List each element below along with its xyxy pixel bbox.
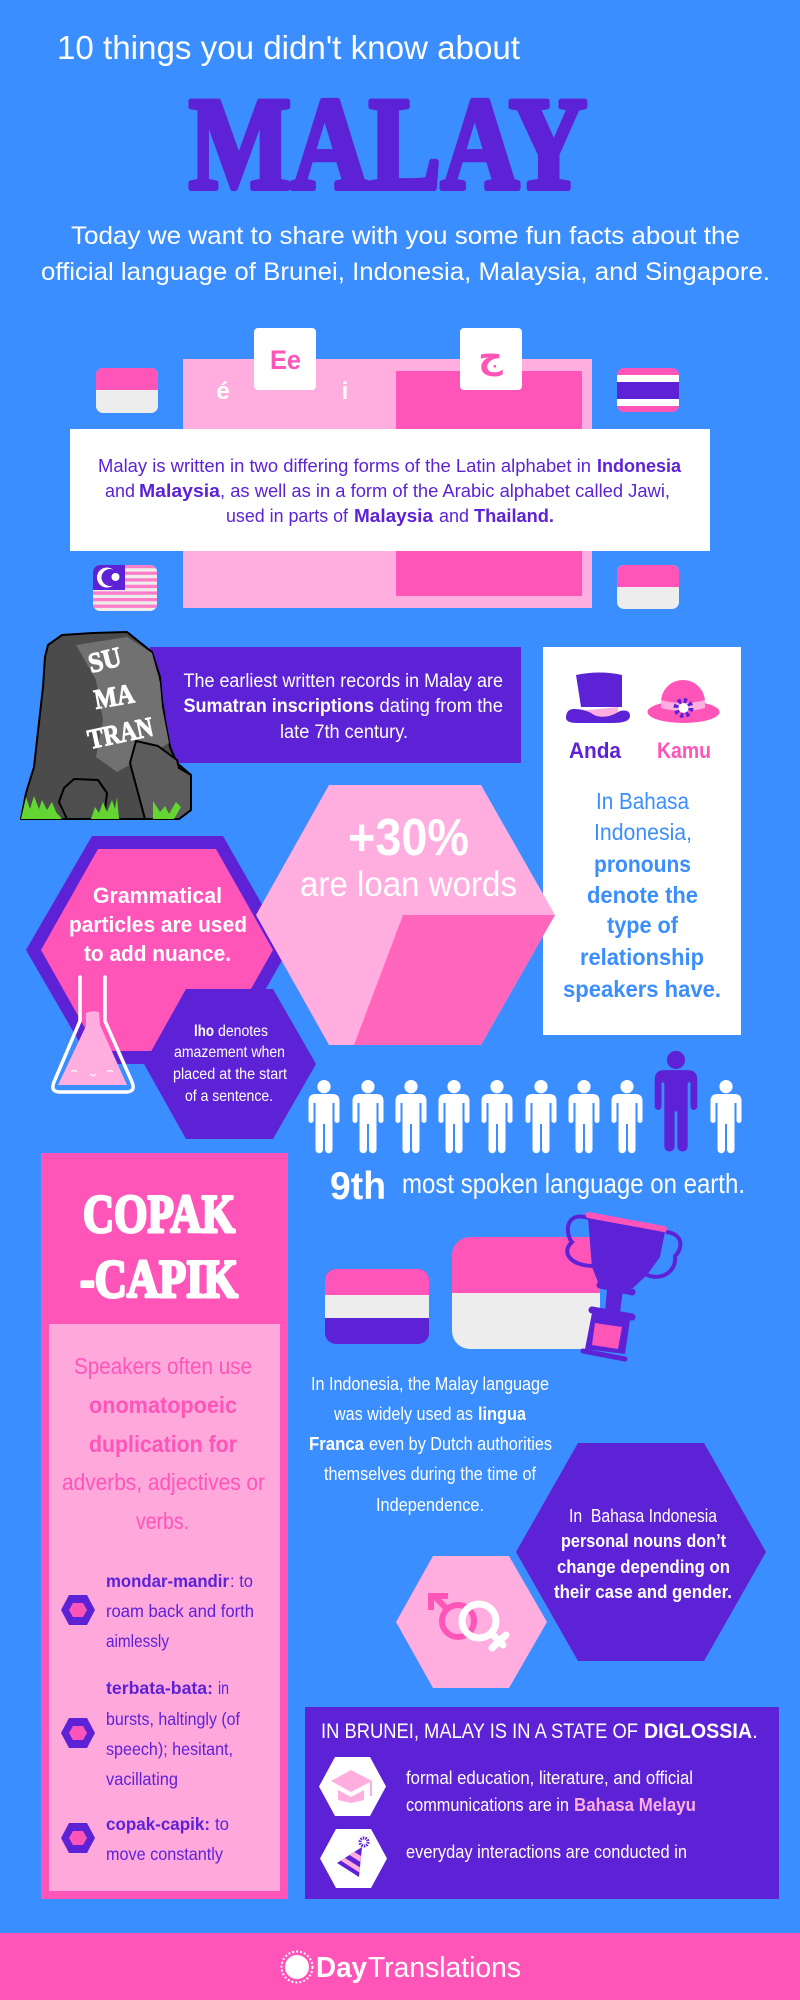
panel: personal nouns hexagon: their case and gender.: [554, 1582, 732, 1602]
panel: lho hexagon: placed at the start: [173, 1066, 287, 1083]
panel: personal nouns hexagon: change depending on: [557, 1557, 730, 1577]
heading: copak-capik: [80, 1184, 238, 1309]
text: formal register: [406, 1768, 696, 1815]
panel: copak-capik: [41, 1153, 288, 1899]
icon: trophy: [567, 1215, 680, 1359]
Latin letters: é: [216, 378, 230, 405]
panel: pronouns: Kamu: [657, 738, 711, 763]
title line: 10 things you didn't know about: [57, 29, 520, 66]
list item: copak-capik: to: [215, 1814, 229, 1834]
callout: writing forms: used in parts of: [226, 506, 349, 526]
list item: terbata-bata: [61, 1678, 240, 1789]
logo wordmark: Day: [316, 1952, 367, 1984]
panel: Sumatran inscriptions: dating from the: [380, 696, 503, 717]
intro paragraph: [41, 222, 770, 286]
text: formal register: formal education, literature, and official: [406, 1768, 693, 1788]
list item: mondar-mandir: aimlessly: [106, 1631, 169, 1651]
list item: terbata-bata: in: [218, 1678, 229, 1698]
heading: diglossia: IN BRUNEI, MALAY IS IN A STATE OF: [321, 1719, 638, 1743]
text: onomatopoeic duplication: Speakers often use: [74, 1353, 252, 1379]
callout: writing forms: Indonesia: [597, 456, 682, 476]
icon: graduation cap: [319, 1757, 386, 1816]
icon: gender symbols: [431, 1596, 506, 1648]
icon: top hat: [566, 672, 630, 723]
panel: pronouns: type of: [607, 912, 678, 938]
panel: lho hexagon: amazement when: [174, 1044, 285, 1061]
panel: pronouns: speakers have.: [563, 976, 721, 1002]
flag: Brunei-style bands: [325, 1269, 429, 1344]
callout: writing forms: , as well as in a form of the Arabic alphabet called Jawi,: [220, 481, 670, 501]
text: onomatopoeic duplication: duplication for: [89, 1431, 237, 1457]
panel: lho hexagon: denotes: [218, 1023, 268, 1040]
list item: terbata-bata: bursts, haltingly (of: [106, 1709, 240, 1729]
heading: copak-capik: -CAPIK: [80, 1249, 238, 1309]
flag: Indonesia bottom right: [617, 565, 679, 609]
intro paragraph: Today we want to share with you some fun facts about the: [71, 222, 740, 250]
ranking statement: [330, 1165, 745, 1208]
panel: Sumatran inscriptions: [150, 647, 521, 763]
callout: writing forms: and: [105, 481, 135, 501]
panel: grammatical particles: particles are used: [69, 912, 247, 937]
flag: Indonesia large: [452, 1237, 600, 1349]
text: onomatopoeic duplication: adverbs, adjectives or: [62, 1469, 265, 1495]
text: formal register: Bahasa Melayu: [574, 1795, 696, 1815]
Latin letters: i: [342, 378, 348, 405]
callout: writing forms: [70, 429, 710, 551]
panel: personal nouns hexagon: personal nouns don’t: [561, 1531, 726, 1551]
icon: party hat: [320, 1829, 387, 1888]
panel: writing systems: [70, 328, 710, 611]
list item: mondar-mandir: : to: [230, 1571, 253, 1591]
Jawi letter: [460, 328, 522, 390]
panel: pronouns: relationship: [580, 944, 704, 970]
callout: writing forms: Malaysia: [354, 506, 434, 526]
panel: grammatical particles: to add nuance.: [84, 941, 231, 966]
panel: gender icon hexagon: [396, 1556, 547, 1688]
text: lingua franca: lingua: [478, 1404, 527, 1424]
text: lingua franca: even by Dutch authorities: [369, 1434, 552, 1454]
callout: writing forms: Malaysia: [139, 481, 221, 501]
panel: personal nouns hexagon: [516, 1443, 766, 1661]
flag: Indonesia top left: [96, 368, 158, 413]
icon: inscribed rock: TRAN: [85, 712, 156, 756]
Latin letters: Ee: [270, 345, 301, 375]
panel: pronouns: [543, 647, 741, 1035]
text: onomatopoeic duplication: [62, 1353, 265, 1534]
footer band: [0, 1933, 800, 2000]
list item: mondar-mandir: mondar-mandir: [106, 1571, 229, 1591]
text: onomatopoeic duplication: verbs.: [136, 1508, 189, 1534]
list item: copak-capik: copak-capik:: [106, 1814, 210, 1834]
list item: terbata-bata: vacillating: [106, 1769, 178, 1789]
list item: terbata-bata: terbata-bata:: [106, 1678, 213, 1698]
panel: lho hexagon: lho: [194, 1023, 214, 1040]
callout: writing forms: Malay is written in two differing forms of the Latin alphabet in: [98, 456, 591, 476]
text: lingua franca: Franca: [309, 1434, 365, 1454]
Jawi letter: ج: [478, 337, 503, 377]
text: onomatopoeic duplication: onomatopoeic: [89, 1392, 237, 1418]
callout: writing forms: Thailand.: [474, 506, 554, 526]
icon: lady's hat: [648, 680, 720, 723]
ranking statement: most spoken language on earth.: [402, 1168, 745, 1199]
text: lingua franca: was widely used as: [333, 1404, 473, 1424]
text: lingua franca: themselves during the time of: [324, 1464, 537, 1484]
panel: loan words hexagon: [256, 785, 555, 1045]
text: lingua franca: In Indonesia, the Malay language: [311, 1374, 549, 1394]
heading: diglossia: .: [752, 1719, 758, 1743]
flag: Malaysia: [93, 565, 157, 611]
panel: grammatical particles: [26, 836, 288, 1064]
panel: loan words hexagon: are loan words: [300, 865, 517, 904]
heading: copak-capik: COPAK: [83, 1184, 235, 1244]
intro paragraph: official language of Brunei, Indonesia, Malaysia, and Singapore.: [41, 258, 770, 286]
panel: pronouns: Anda: [569, 738, 622, 763]
text: everyday register: everyday interactions are conducted in: [406, 1842, 687, 1862]
text: lingua franca: Independence.: [376, 1495, 484, 1515]
title: MALAY: MALAY: [189, 70, 587, 217]
panel: Sumatran inscriptions: late 7th century.: [280, 722, 408, 743]
script backdrop: [183, 359, 592, 608]
heading: diglossia: DIGLOSSIA: [644, 1719, 752, 1743]
pictogram: people row: [308, 1051, 742, 1153]
panel: lho hexagon: [144, 989, 316, 1139]
list item: copak-capik: [61, 1814, 229, 1864]
icon: inscribed rock: SU: [85, 642, 125, 680]
list item: mondar-mandir: [61, 1571, 254, 1651]
icon: inscribed rock: MA: [92, 678, 137, 716]
Latin letters: [216, 328, 348, 405]
panel: personal nouns hexagon: In Bahasa Indonesia: [569, 1506, 718, 1526]
panel: diglossia: [305, 1707, 779, 1899]
list item: terbata-bata: speech); hesitant,: [106, 1739, 233, 1759]
panel: pronouns: pronouns: [594, 851, 691, 877]
callout: writing forms: and: [439, 506, 469, 526]
list item: mondar-mandir: roam back and forth: [106, 1601, 254, 1621]
icon: inscribed rock: [21, 632, 191, 819]
panel: grammatical particles: Grammatical: [93, 883, 222, 908]
panel: pronouns: denote the: [587, 882, 698, 908]
list item: copak-capik: move constantly: [106, 1844, 223, 1864]
logo wordmark: Translations: [368, 1952, 521, 1984]
panel: lho hexagon: of a sentence.: [185, 1088, 273, 1105]
text: formal register: communications are in: [406, 1795, 569, 1815]
logo mark: [282, 1952, 312, 1982]
text: lingua franca: [309, 1374, 552, 1515]
panel: Sumatran inscriptions: Sumatran inscriptions: [184, 696, 374, 717]
panel: loan words hexagon: +30%: [348, 809, 469, 867]
panel: Sumatran inscriptions: The earliest written records in Malay are: [184, 671, 503, 692]
ranking statement: 9th: [330, 1165, 386, 1208]
panel: pronouns: In Bahasa: [596, 788, 689, 814]
panel: pronouns: Indonesia,: [594, 819, 692, 845]
flag: Thailand: [617, 368, 679, 412]
icon: flask: [53, 977, 133, 1092]
